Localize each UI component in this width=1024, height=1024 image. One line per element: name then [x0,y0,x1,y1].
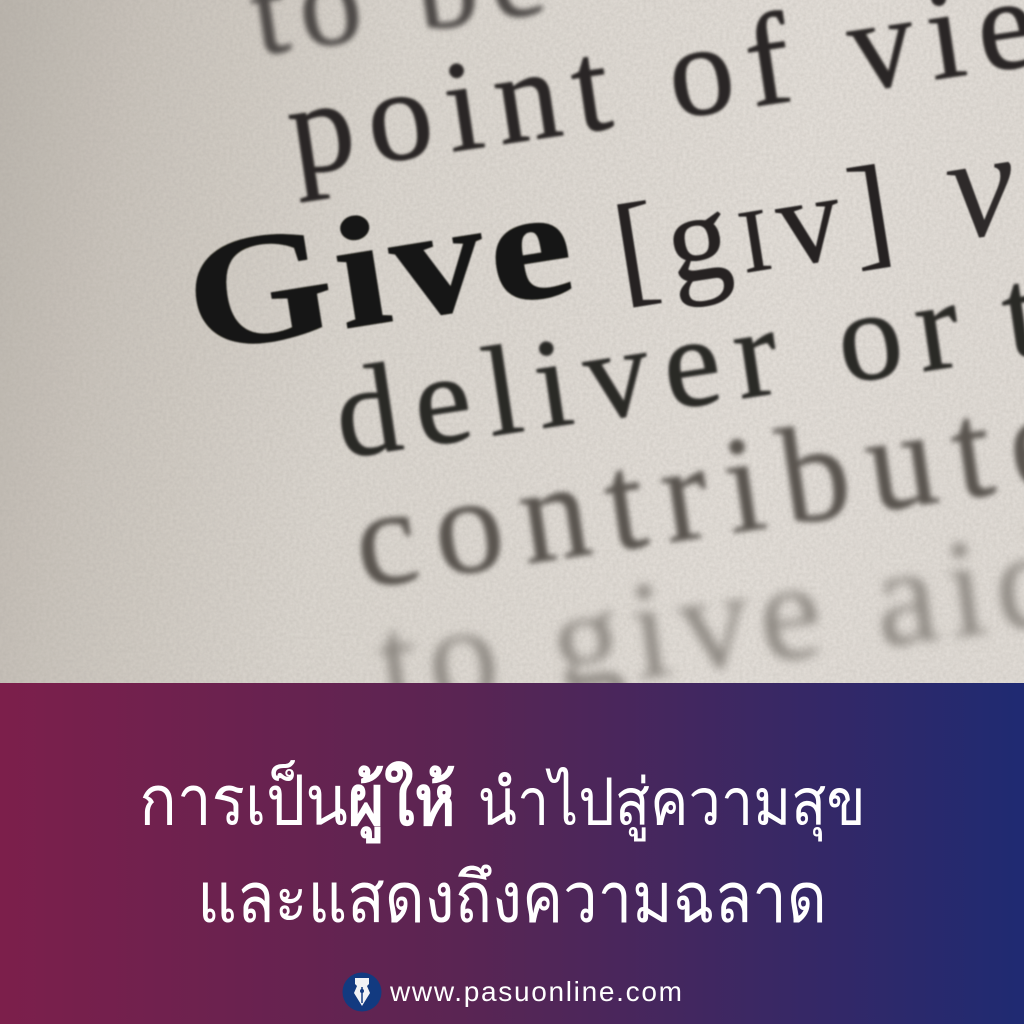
icon: pen nib logo [342,972,382,1012]
website url: www.pasuonline.com [390,976,684,1007]
pronunciation: [gɪv] v: v [934,98,1024,273]
paper background [0,0,1024,683]
heading line 2: และแสดงถึงความฉลาด [197,859,827,938]
pronunciation: [gɪv] v: [gIv] [605,138,911,320]
pronunciation: [gɪv] v [605,98,1024,320]
heading line 1: การเป็นผู้ให้ นำไปสู่ความสุข [139,763,866,840]
gradient band [0,683,1024,1024]
headword: Give: Give [174,153,588,386]
photo: dictionary page with the word Give [0,0,1024,683]
